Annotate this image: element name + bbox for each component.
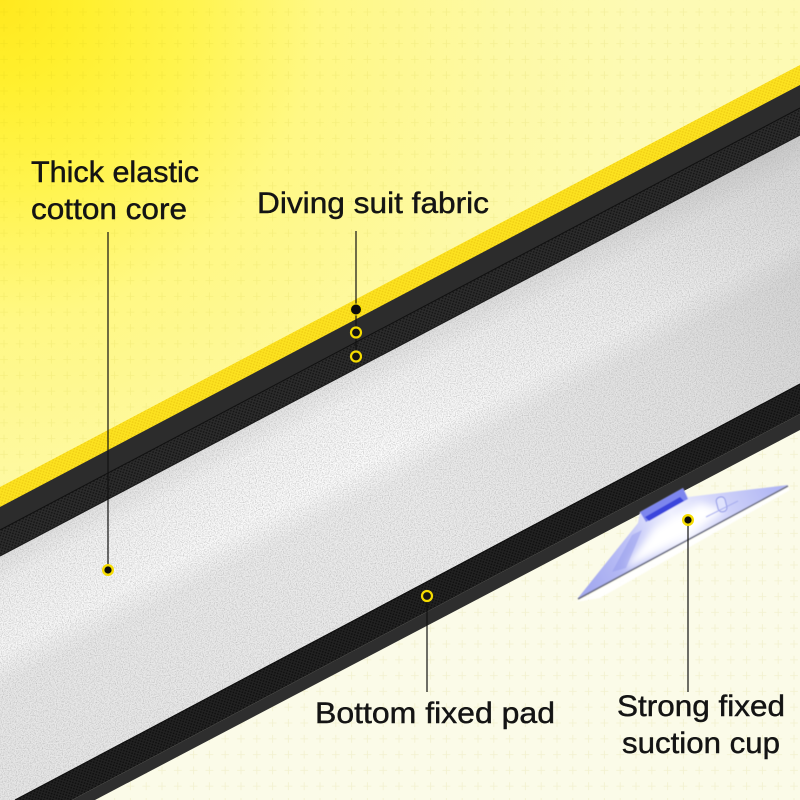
callout: bottom fixed pad: Bottom fixed pad [315,697,555,730]
callout: diving suit fabric [257,187,489,362]
panel: top yellow and black layers [0,65,800,556]
icon: suction cup [576,485,790,602]
callout: strong fixed suction cup [617,515,785,760]
callout: thick elastic cotton core: Thick elastic [31,156,199,189]
callout: thick elastic cotton core [31,156,199,575]
callout: thick elastic cotton core: cotton core [31,193,187,226]
callout: bottom fixed pad [315,591,555,730]
callout: diving suit fabric: Diving suit fabric [257,187,489,220]
panel: bottom fixed pad layers [15,384,800,800]
callout: strong fixed suction cup: suction cup [622,727,780,760]
callout: strong fixed suction cup: Strong fixed [617,690,785,723]
